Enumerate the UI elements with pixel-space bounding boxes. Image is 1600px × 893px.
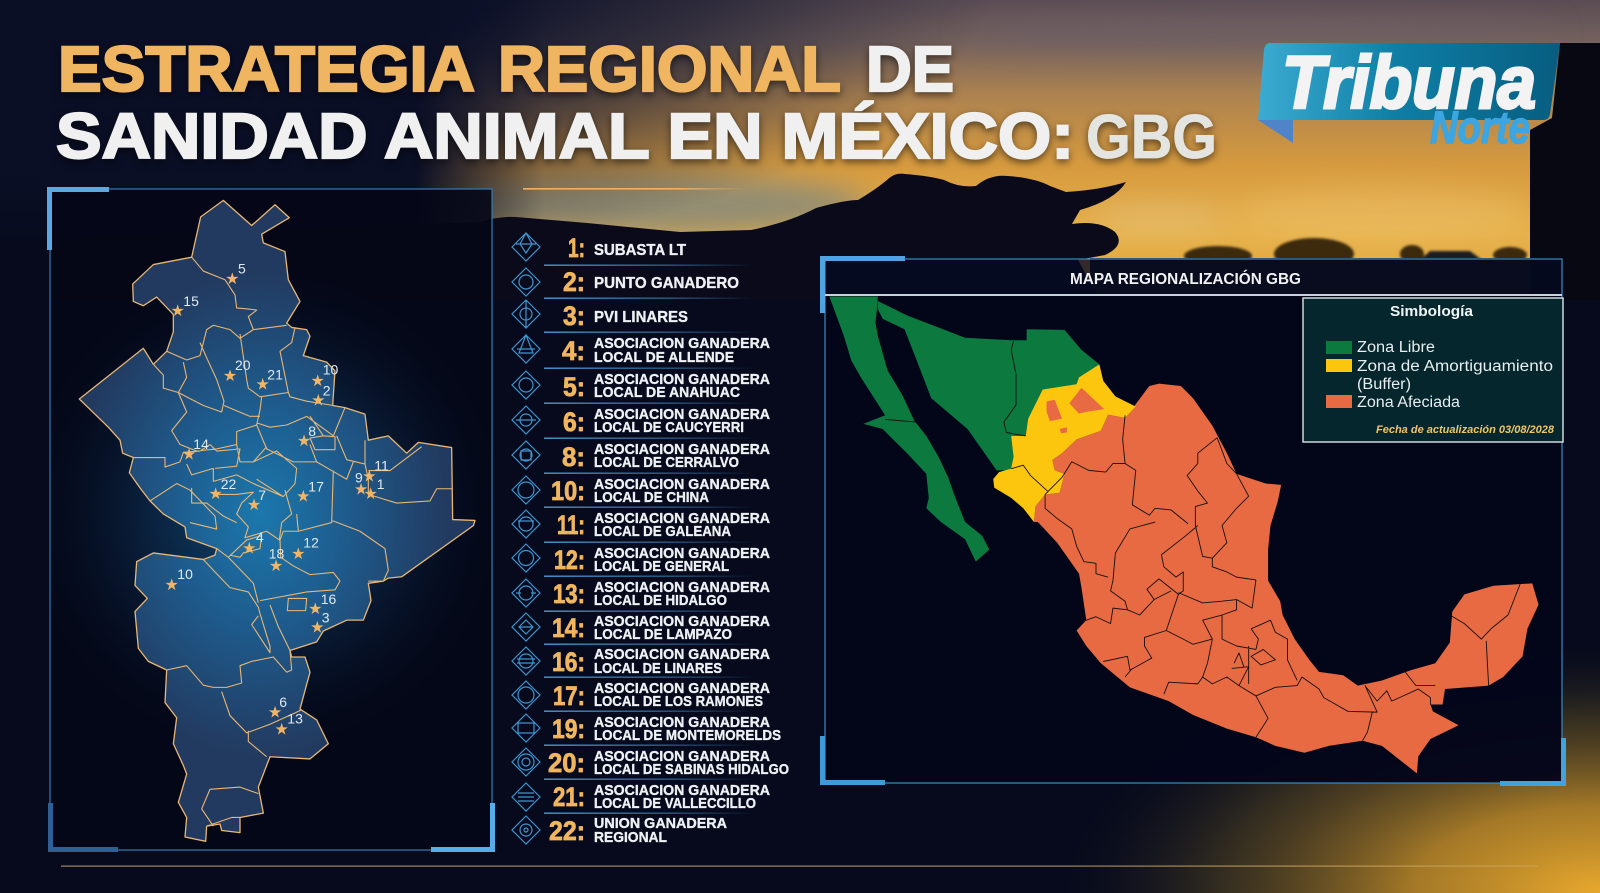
trees on horizon [1184,238,1527,270]
map markers: stars and numbers: ★ [308,599,322,618]
map markers: stars and numbers: ★ [291,544,305,563]
row 2: PUNTO GANADERO [594,275,739,292]
row 10: LOCAL DE CHINA [594,490,709,506]
map markers: stars and numbers: 4 [256,529,264,545]
row 4: 4: [562,336,585,366]
legend item: zona de amortiguamiento: Zona de Amortiguamiento [1357,358,1553,375]
legend: Simbología [1303,298,1563,442]
title line 2: SANIDAD ANIMAL EN MÉXICO: [56,100,1074,172]
bull and hills silhouette [0,174,1126,893]
row 17 [512,681,770,711]
map markers: stars and numbers: 1 [377,476,385,492]
row 1 [512,233,686,263]
map markers: stars and numbers: 9 [355,470,363,486]
map markers: stars and numbers: 7 [258,487,266,503]
row 8: LOCAL DE CERRALVO [594,455,739,471]
map markers: stars and numbers: 10 [323,361,338,377]
zone: amortiguamiento [993,364,1136,522]
row 6: 6: [563,407,585,437]
map markers: stars and numbers: ★ [311,390,325,410]
row 19: LOCAL DE MONTEMORELDS [594,728,781,744]
map markers: stars and numbers: ★ [311,371,325,390]
map markers: stars and numbers: ★ [165,575,179,594]
map markers: stars and numbers: ★ [268,702,282,722]
zone: libre [829,296,1099,562]
title [56,33,1217,172]
legend item: zona libre: Zona Libre [1357,339,1435,356]
legend item: zona libre [1326,339,1435,356]
list: sale points and associations [512,233,789,846]
logo: Tribuna Norte: Tribuna [1282,41,1536,124]
row 16: 16: [552,647,585,677]
row 16 [512,647,770,677]
row 13 [512,579,770,609]
map markers: stars and numbers: 2 [323,382,331,398]
affected patches inside buffer [1047,388,1104,433]
row 4 [512,335,770,366]
row 21: ASOCIACION GANADERA [594,783,770,799]
legend title: Simbología [1390,303,1474,320]
row 19: 19: [552,714,585,744]
post on right edge [1530,43,1600,720]
row 3: 3: [563,301,585,331]
map markers: stars and numbers: ★ [223,366,237,385]
row dividers [544,264,754,814]
map markers: stars and numbers: ★ [364,484,378,503]
row 21: LOCAL DE VALLECCILLO [594,796,756,812]
row 14: 14: [552,613,585,643]
map markers: stars and numbers: 11 [374,458,389,474]
row 4: LOCAL DE ALLENDE [594,350,734,366]
row 8: ASOCIACION GANADERA [594,442,770,458]
map markers: stars and numbers: ★ [209,484,223,503]
map markers: stars and numbers: 13 [287,710,303,726]
row 4: ASOCIACION GANADERA [594,336,770,352]
legend item: zona afectada: Zona Afeciada [1357,394,1460,411]
row 14: ASOCIACION GANADERA [594,614,770,630]
update date: Fecha de actualización 03/08/2028 [1376,424,1555,436]
map markers: stars and numbers: 18 [269,546,284,562]
row 12: LOCAL DE GENERAL [594,559,729,575]
row 13: 13: [553,579,585,609]
map markers: stars and numbers: 16 [321,591,336,607]
frame corners [820,256,1566,786]
map markers: stars and numbers: 22 [221,476,236,492]
logo: Tribuna Norte [1258,41,1560,153]
row 5: ASOCIACION GANADERA [594,372,770,388]
row 17: ASOCIACION GANADERA [594,681,770,697]
row 20: 20: [548,748,585,778]
row 11: ASOCIACION GANADERA [594,511,770,527]
panel: Nuevo León map [47,187,495,852]
row 5 [512,371,770,402]
divider under title [523,188,748,190]
map markers: stars and numbers: 8 [308,423,316,439]
title line 1: ESTRATEGIA [58,33,475,105]
row 19 [512,714,781,744]
row 13: LOCAL DE HIDALGO [594,593,727,609]
bottom divider line [61,866,1538,867]
row 12: ASOCIACION GANADERA [594,546,770,562]
state borders [885,341,1520,741]
row 14 [512,613,770,643]
legend item: zona de amortiguamiento [1326,358,1553,393]
row 16: LOCAL DE LINARES [594,661,722,677]
panel heading: MAPA REGIONALIZACIÓN GBG [1070,269,1301,288]
panel: Mexico regionalization map [820,256,1566,786]
map markers: stars and numbers: ★ [269,556,283,575]
row 17: 17: [553,681,585,711]
row 3: PVI LINARES [594,309,688,326]
map markers: stars and numbers: 12 [303,535,319,551]
row 11: 11: [557,510,585,540]
row 17: LOCAL DE LOS RAMONES [594,694,763,710]
row 6: ASOCIACION GANADERA [594,407,770,423]
row 8 [512,441,770,472]
map: Nuevo León municipalities [79,200,475,841]
row 14: LOCAL DE LAMPAZO [594,627,732,643]
map markers: stars and numbers: ★ [362,466,376,486]
map markers: stars and numbers: 3 [322,609,330,625]
row 2 [512,267,739,297]
row 11: LOCAL DE GALEANA [594,524,731,540]
map markers: stars and numbers: 17 [308,478,324,494]
map markers: stars and numbers [165,261,389,738]
map markers: stars and numbers: ★ [256,374,270,394]
row 10: 10: [551,476,585,506]
logo: Tribuna Norte: Norte [1430,102,1530,153]
row 2: 2: [563,267,585,297]
row 20: LOCAL DE SABINAS HIDALGO [594,762,789,778]
map markers: stars and numbers: ★ [297,431,311,450]
row 16: ASOCIACION GANADERA [594,647,770,663]
row 21 [512,782,770,812]
row 19: ASOCIACION GANADERA [594,715,770,731]
zone: afectada [1034,384,1539,773]
map markers: stars and numbers: 14 [193,436,209,452]
map markers: stars and numbers: ★ [225,269,239,288]
title line 2: GBG [1086,103,1217,172]
map markers: stars and numbers: 10 [177,566,193,582]
row 20: ASOCIACION GANADERA [594,749,770,765]
row 22: REGIONAL [594,830,667,846]
map markers: stars and numbers: ★ [171,301,185,320]
title line 1: REGIONAL [498,33,841,105]
row 6 [512,406,770,437]
row 12: 12: [554,545,585,575]
map markers: stars and numbers: 6 [279,694,287,710]
map markers: stars and numbers: ★ [354,480,368,498]
map markers: stars and numbers: 15 [183,293,199,309]
row 10 [512,476,770,506]
map markers: stars and numbers: ★ [182,444,196,464]
row 11 [512,510,770,540]
row 21: 21: [553,782,585,812]
map markers: stars and numbers: ★ [275,720,289,738]
row 20 [512,748,789,778]
map markers: stars and numbers: 21 [267,366,283,382]
frame corners [47,187,495,852]
map markers: stars and numbers: 20 [235,357,251,373]
row 22: 22: [549,816,585,846]
row 6: LOCAL DE CAUCYERRI [594,420,744,436]
map markers: stars and numbers: ★ [242,538,256,558]
row 12 [512,544,770,575]
map markers: stars and numbers: ★ [310,618,324,636]
row 1: 1: [568,233,585,263]
title line 1 [58,33,954,105]
map: Mexico zones [829,296,1539,773]
row 10: ASOCIACION GANADERA [594,477,770,493]
row 5: LOCAL DE ANAHUAC [594,385,740,401]
title line 1: DE [866,33,954,105]
row 8: 8: [562,442,585,472]
map markers: stars and numbers: ★ [247,495,261,514]
row 13: ASOCIACION GANADERA [594,580,770,596]
map markers: stars and numbers: 5 [238,261,246,277]
row 1: SUBASTA LT [594,242,686,259]
map markers: stars and numbers: ★ [296,486,310,506]
row 5: 5: [563,372,585,402]
legend item: zona de amortiguamiento: (Buffer) [1357,376,1411,393]
row 22: UNION GANADERA [594,816,727,832]
row 3 [512,300,688,331]
row 22 [512,816,727,846]
